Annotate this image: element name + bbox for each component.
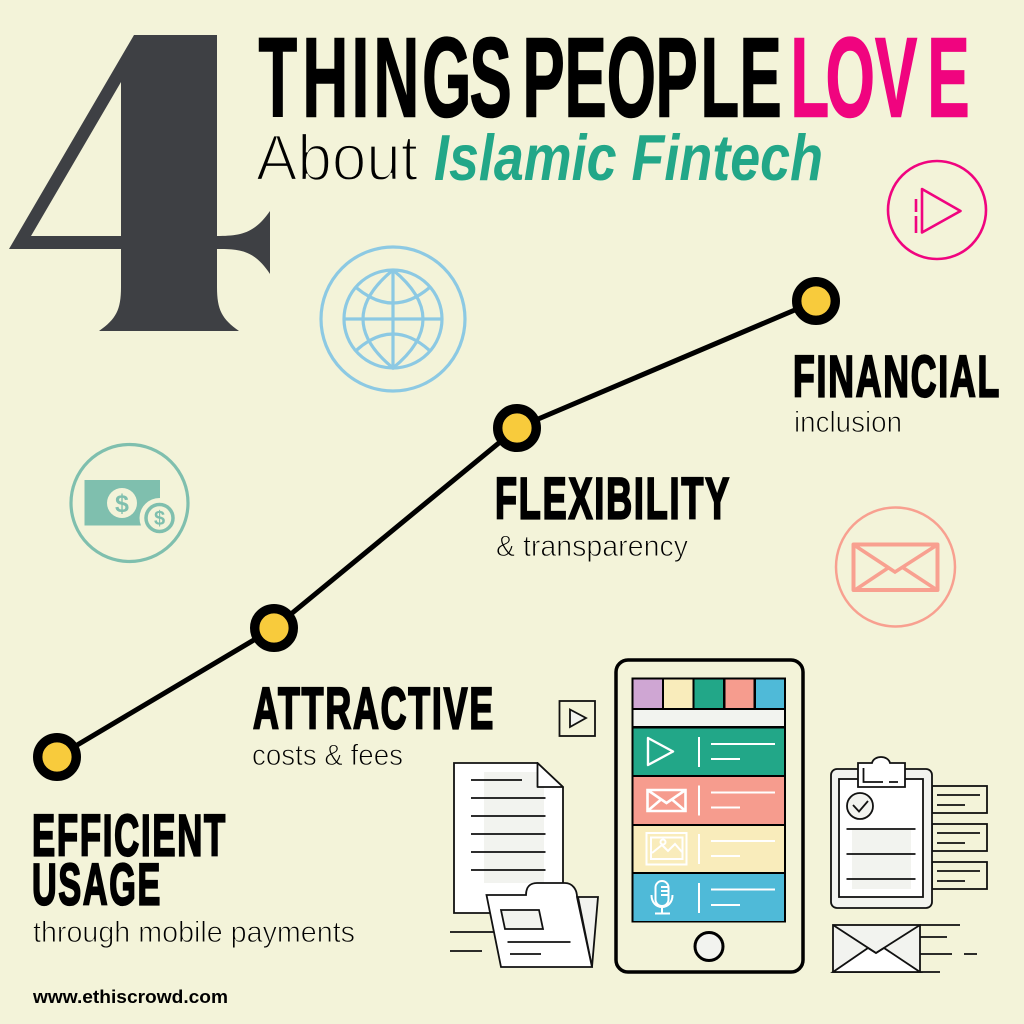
title: things people love bbox=[258, 15, 970, 141]
home button bbox=[695, 932, 723, 960]
title: things people love: LOVE bbox=[790, 15, 970, 141]
label: attractive costs and fees: ATTRACTIVE bbox=[253, 676, 495, 742]
icon: globe bbox=[321, 247, 465, 391]
icon: row microphone bbox=[652, 881, 672, 914]
subtitle: about islamic fintech: Islamic Fintech bbox=[434, 121, 823, 194]
label: financial inclusion: inclusion bbox=[794, 406, 902, 439]
label: flexibility and transparency bbox=[495, 466, 731, 563]
label: efficient usage through mobile payments bbox=[32, 804, 355, 949]
label: efficient usage through mobile payments: through mobile payments bbox=[33, 916, 355, 949]
big numeral 4 bbox=[9, 35, 270, 331]
subtitle: about islamic fintech: About bbox=[256, 121, 418, 194]
document illustration bbox=[454, 763, 563, 913]
label: efficient usage through mobile payments: USAGE bbox=[32, 852, 162, 918]
title: things people love: PEOPLE bbox=[523, 15, 782, 141]
phone illustration bbox=[616, 660, 803, 972]
icon: money circle: $ bbox=[154, 508, 165, 530]
subtitle: about islamic fintech bbox=[256, 121, 823, 194]
title: things people love: THINGS bbox=[258, 15, 512, 141]
label: attractive costs and fees bbox=[252, 676, 495, 772]
progress line bbox=[57, 301, 816, 757]
icon: row image bbox=[646, 833, 686, 864]
envelope illustration bbox=[833, 925, 977, 972]
icon: play circle bbox=[888, 161, 986, 259]
label: financial inclusion bbox=[793, 344, 1001, 439]
clipboard illustration bbox=[831, 757, 987, 908]
label: flexibility and transparency: & transparency bbox=[496, 530, 688, 563]
row line glyphs bbox=[699, 737, 775, 913]
folder illustration bbox=[450, 883, 598, 967]
label: flexibility and transparency: FLEXIBILITY bbox=[495, 466, 731, 532]
website url: www.ethiscrowd.com bbox=[32, 987, 228, 1007]
milestone markers bbox=[38, 282, 835, 776]
icon: money circle: $ bbox=[115, 490, 129, 518]
icon: row play bbox=[648, 738, 673, 765]
phone screen bbox=[632, 678, 786, 922]
icon: row mail bbox=[648, 790, 686, 811]
icon: small play box bbox=[560, 701, 595, 736]
label: efficient usage through mobile payments: EFFICIENT bbox=[32, 804, 227, 868]
icon: money circle bbox=[71, 444, 188, 562]
label: attractive costs and fees: costs & fees bbox=[252, 739, 403, 772]
icon: envelope circle bbox=[836, 508, 955, 626]
